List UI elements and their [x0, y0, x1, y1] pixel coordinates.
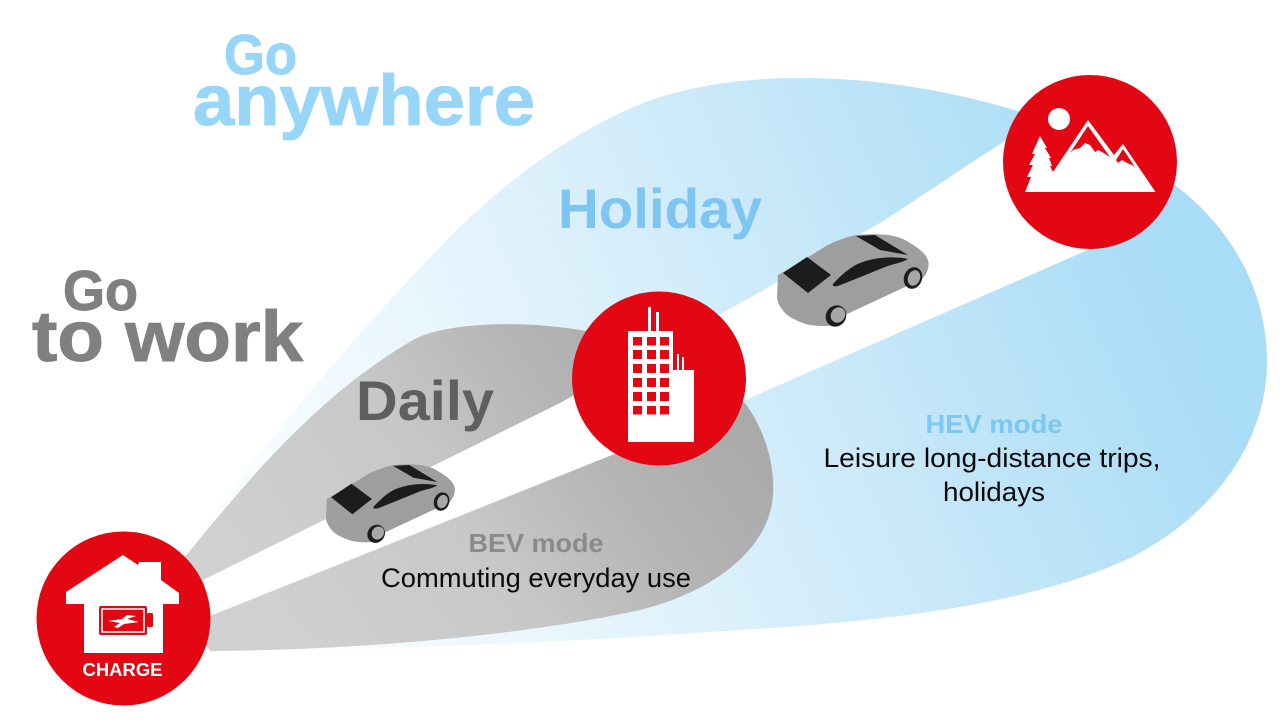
text block: BEV mode: Commuting everyday use	[381, 563, 691, 593]
panel: blue HEV range area	[170, 78, 1267, 650]
heading: Go to work	[32, 259, 304, 377]
text block: HEV mode: HEV mode	[926, 409, 1062, 439]
road: white band	[203, 125, 1110, 616]
icon: city building	[572, 292, 746, 466]
label: Daily: Daily	[356, 369, 494, 432]
icon: mountains	[1003, 75, 1177, 249]
heading: Go anywhere	[193, 23, 535, 141]
heading: Go to work: Go	[63, 259, 138, 323]
text block: HEV mode	[824, 409, 1160, 507]
icon: car on daily road	[326, 464, 455, 546]
text block: HEV mode: holidays	[943, 477, 1045, 507]
panel: grey BEV range area	[170, 324, 773, 651]
heading: Go to work: to work	[32, 298, 304, 377]
icon: charge house: CHARGE	[82, 660, 162, 680]
text block: BEV mode: BEV mode	[468, 528, 604, 558]
heading: Go anywhere: Go	[224, 23, 297, 87]
heading: Go anywhere: anywhere	[193, 62, 535, 141]
label: Holiday: Holiday	[558, 177, 762, 240]
icon: car on holiday road	[777, 234, 929, 331]
icon: charge house	[36, 532, 210, 706]
text block: BEV mode	[381, 528, 691, 593]
text block: HEV mode: Leisure long-distance trips,	[824, 443, 1160, 473]
